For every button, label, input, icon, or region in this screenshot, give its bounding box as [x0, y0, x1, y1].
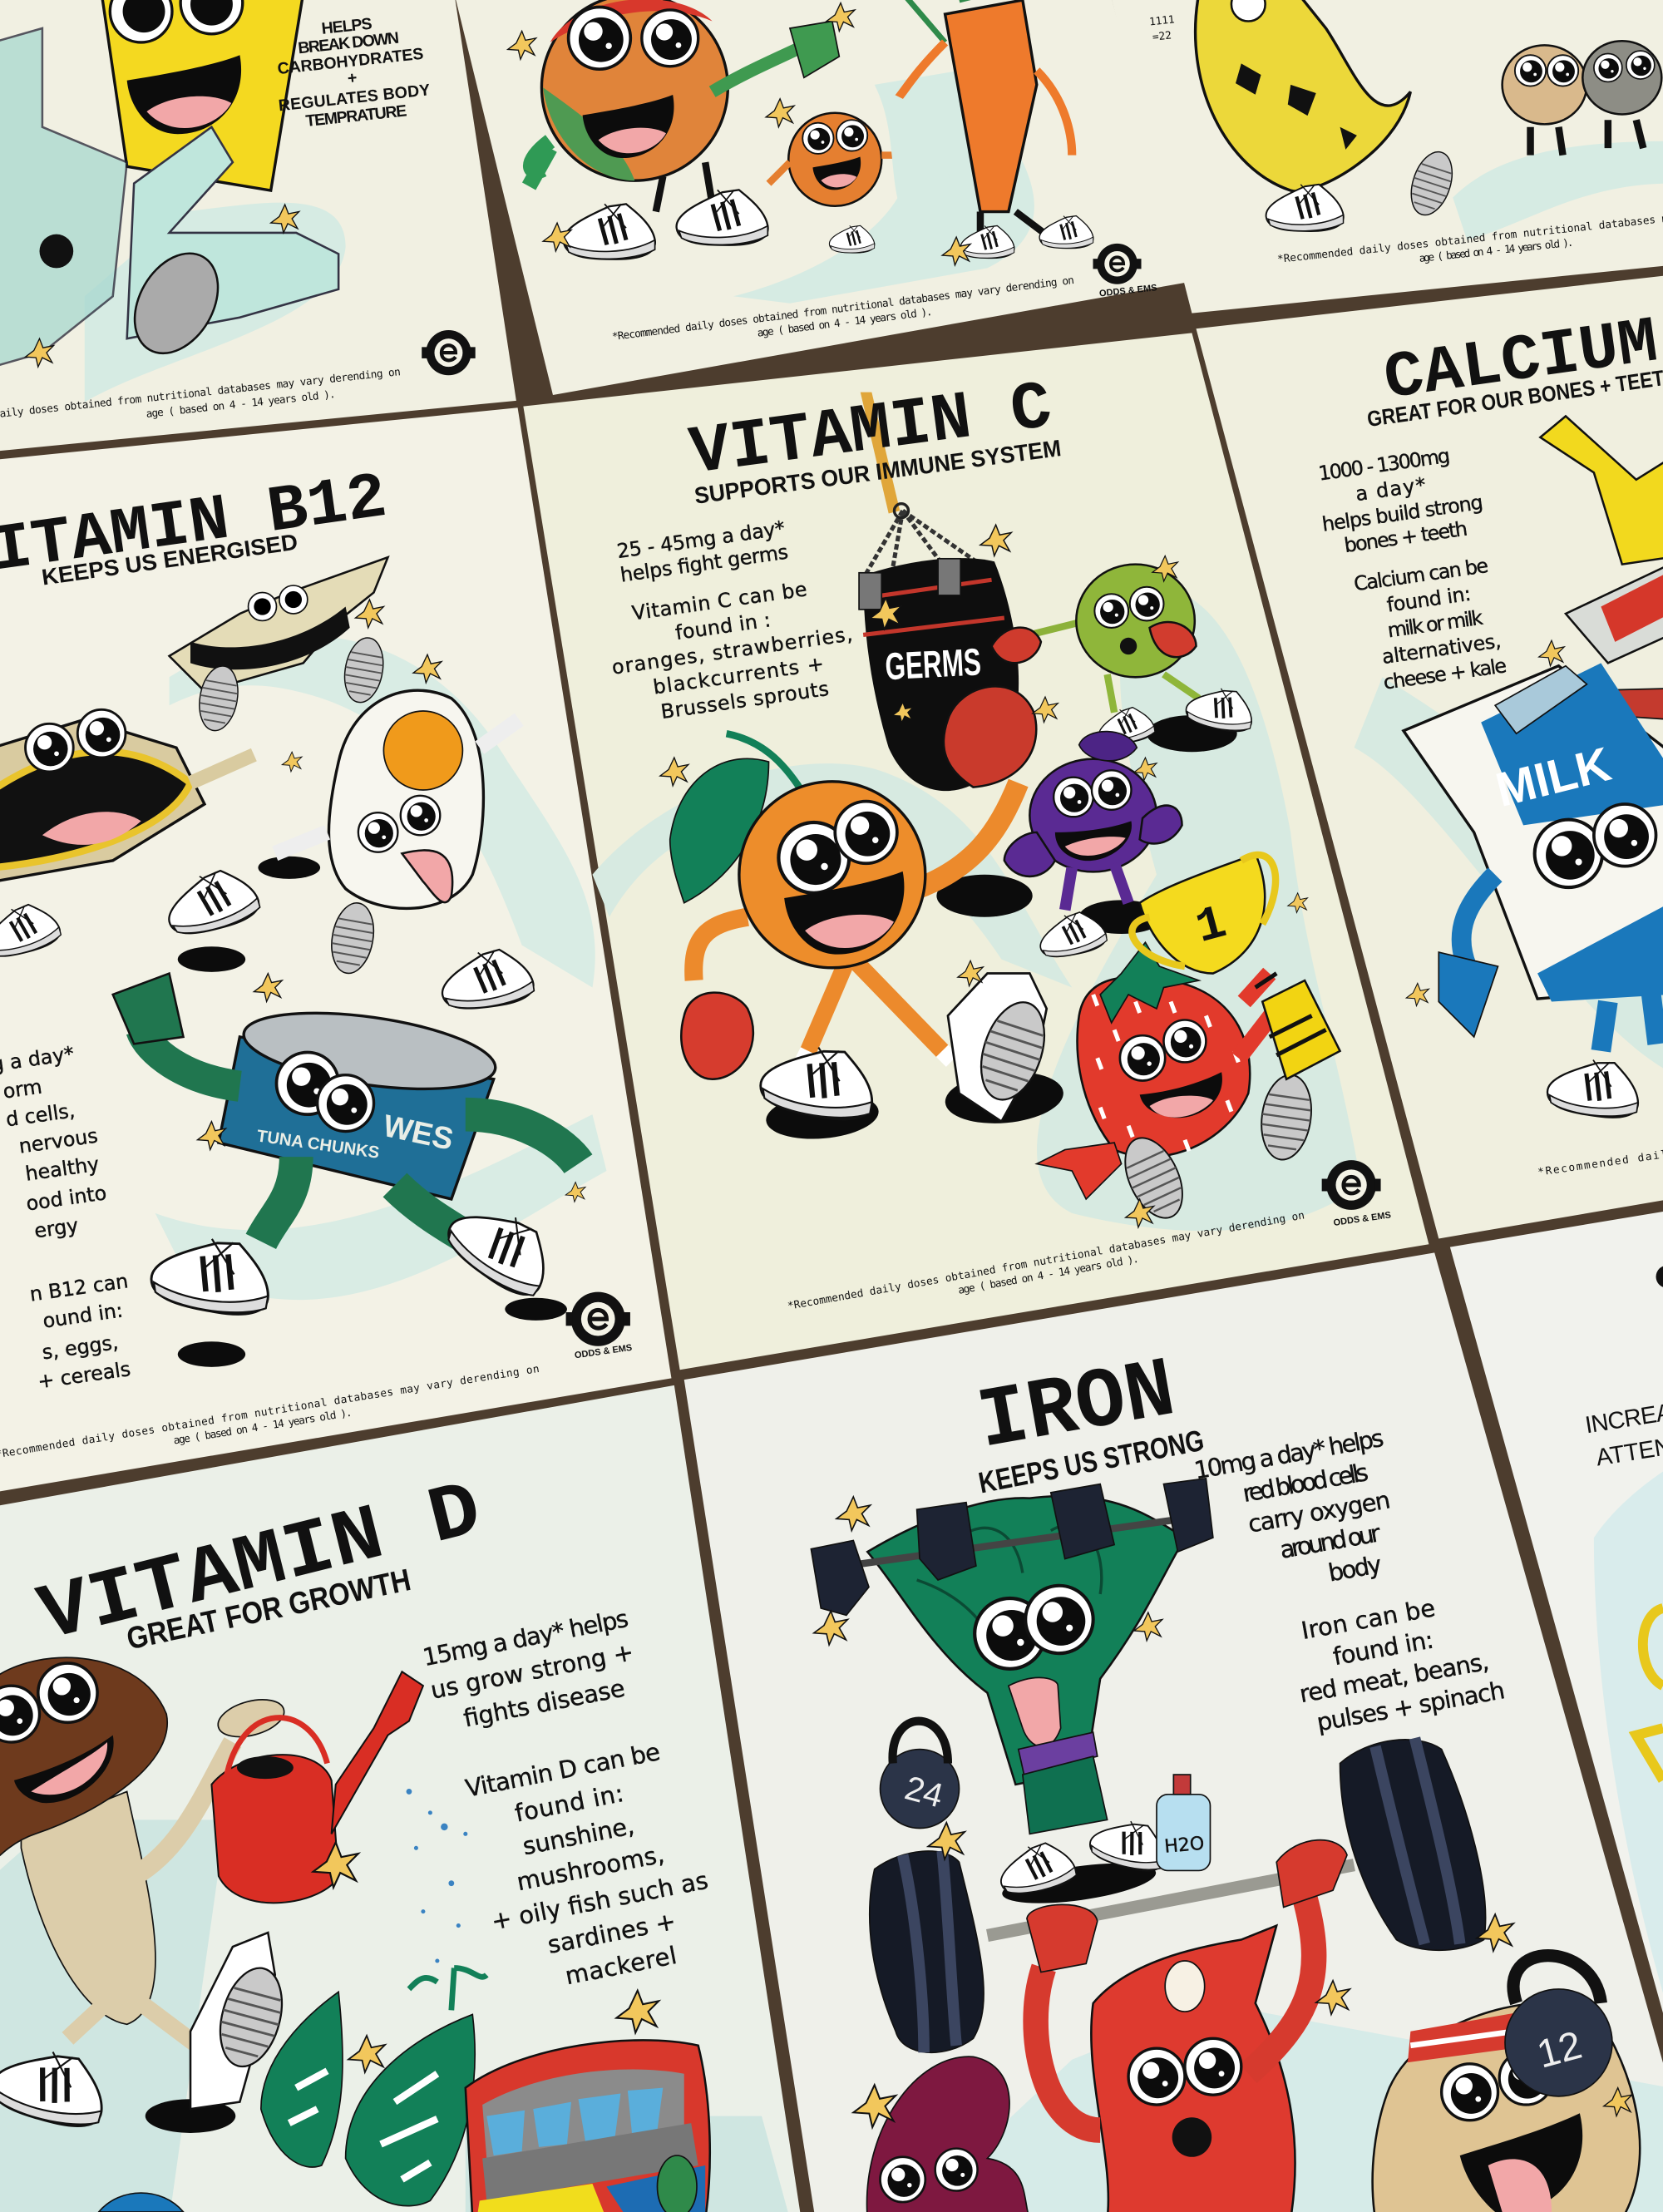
character: mango: [529, 0, 839, 259]
trophy: [1132, 853, 1340, 1079]
text: benefits: n B12 can: [28, 1269, 130, 1306]
text: benefits: [0, 1039, 142, 1394]
can sublabel: TUNA CHUNKS: [255, 1127, 381, 1163]
text: dose: [1192, 1410, 1507, 1750]
text: dose: Vitamin D can be: [463, 1737, 663, 1803]
character: top clam: [170, 557, 388, 733]
logo fragment: [1656, 1266, 1663, 1288]
label: odds and ems: ODDS & EMS: [1333, 1210, 1392, 1228]
poster: calcium (middle right): [1197, 275, 1663, 1238]
rope: [861, 393, 900, 514]
swirl background: [903, 2003, 1663, 2212]
character: water glass: [0, 28, 338, 368]
leaves: [261, 1968, 486, 2206]
character: yellow arm: [1636, 1608, 1663, 1780]
text: benefits: ood into: [25, 1181, 108, 1216]
text: dose: Brussels sprouts: [659, 677, 830, 723]
poster: water (top left): [0, 0, 516, 452]
subtitle: GREAT FOR GROWTH: [124, 1562, 413, 1656]
text: dose: 15mg a day* helps: [421, 1604, 631, 1671]
text: dose: mackerel: [563, 1941, 679, 1990]
text: dose: + oily fish such as: [489, 1866, 710, 1936]
text: benefits: BREAK DOWN: [297, 29, 400, 57]
text: dose: milk or milk: [1386, 606, 1484, 642]
character: small friends: [1503, 41, 1661, 156]
logo: [1322, 1160, 1381, 1210]
glove: right: [944, 686, 1036, 788]
sardine can: [466, 2040, 710, 2212]
text: dose: blackcurrents +: [652, 652, 826, 699]
text: dose: found in:: [512, 1779, 626, 1828]
text: dose: mushrooms,: [515, 1840, 667, 1896]
title: IRON: [971, 1342, 1182, 1472]
text: benefits: nervous: [17, 1124, 99, 1158]
barbell: [870, 1738, 1486, 2052]
text: doodle total: =22: [1152, 28, 1172, 43]
character: milk carton: [1404, 663, 1663, 1122]
label: odds and ems: ODDS & EMS: [574, 1343, 633, 1360]
poster: vitamin d (bottom left): [0, 1385, 802, 2212]
character: yellow toothbrush friend: [1540, 416, 1663, 719]
text: dose: us grow strong +: [428, 1637, 636, 1705]
logo: [422, 330, 476, 375]
text: attention: [1583, 1399, 1663, 1473]
text: dose: Vitamin C can be: [630, 577, 808, 625]
swirl background: [1594, 1467, 1663, 2017]
stars: [508, 2, 970, 265]
swirl background: [592, 588, 1361, 1231]
text: dose: red meat, beans,: [1297, 1647, 1491, 1708]
footnote: daily doses obtained from nutritional databases may vary derending on: [0, 365, 401, 420]
character: steak: [1027, 1840, 1347, 2212]
swirl background: [733, 71, 1034, 304]
character: orange: [670, 686, 1065, 1143]
text: dose: sunshine,: [521, 1811, 636, 1860]
poster: banana (top right): [1110, 0, 1663, 314]
text: dose: around our: [1278, 1518, 1383, 1564]
text: dose: pulses + spinach: [1315, 1676, 1507, 1736]
poster: vitamin c (middle centre): [523, 333, 1429, 1370]
footnote: *Recommended daily doses obtained from nutritional databases may vary derending on: [611, 274, 1075, 343]
character: strawberry: [1037, 942, 1316, 1227]
label: odds and ems: ODDS & EMS: [1098, 283, 1157, 299]
swoosh: [875, 85, 960, 239]
title: VITAMIN D: [30, 1466, 490, 1662]
glove: left: [681, 993, 753, 1079]
character: left clam: [0, 709, 263, 962]
text: benefits: +: [347, 69, 358, 88]
text: dose: alternatives,: [1380, 629, 1503, 669]
bag label: GERMS: [884, 640, 982, 688]
character: punching bag: [859, 504, 1019, 791]
carton label: MILK: [1491, 738, 1616, 817]
text: dose: [595, 509, 861, 729]
can label: WES: [380, 1108, 456, 1157]
text: dose: 10mg a day* helps: [1192, 1424, 1386, 1484]
footnote: age ( based on 4 - 14 years old ).: [957, 1252, 1140, 1296]
text: dose: cheese + kale: [1382, 654, 1508, 694]
swirl background: [0, 1819, 790, 2212]
poster: focus (bottom right): [1450, 1211, 1663, 2038]
poster: iron (bottom centre): [684, 1252, 1663, 2212]
water spray: [407, 1789, 475, 2055]
footnote: age ( based on 4 - 14 years old ).: [146, 388, 336, 420]
text: benefits: REGULATES BODY: [278, 81, 431, 115]
swirl background: [155, 636, 606, 1300]
swirl background: [85, 203, 346, 402]
text: doodle sum: 1111: [1148, 12, 1175, 27]
text: benefits: + cereals: [37, 1357, 132, 1393]
bottle label: H2O: [1163, 1834, 1205, 1858]
text: dose: Calcium can be: [1352, 554, 1490, 595]
text: benefits: HELPS: [321, 15, 373, 38]
character: carrot: [889, 0, 1093, 258]
text: benefits: ound in:: [42, 1298, 125, 1333]
text: benefits: TEMPRATURE: [305, 101, 407, 131]
text: dose: [421, 1598, 723, 2005]
text: dose: oranges, strawberries,: [610, 622, 854, 679]
swirl background: [1354, 677, 1663, 1072]
character: kidney bean: [867, 2056, 1029, 2212]
character: blackcurrant: [1004, 732, 1182, 961]
text: benefits: d cells,: [4, 1099, 76, 1131]
text: dose: body: [1326, 1550, 1384, 1587]
water bottle: [1157, 1775, 1210, 1870]
stars: [814, 1497, 1632, 2127]
kettlebell: 24: [881, 1721, 960, 1829]
text: dose: 25 - 45mg a day*: [615, 516, 787, 563]
character: potato: [1373, 1956, 1640, 2212]
swirl background: [1453, 141, 1663, 239]
stars: [313, 1842, 659, 2072]
text: dose: red blood cells: [1241, 1458, 1370, 1508]
leaf: [670, 758, 769, 903]
character: spinach: [867, 1496, 1185, 1911]
title: VITAMIN C: [685, 370, 1056, 493]
character: mushroom: [0, 1657, 292, 2134]
text: benefits: CARBOHYDRATES: [277, 45, 424, 78]
text: dose: a day*: [1354, 473, 1427, 506]
subtitle: SUPPORTS OUR IMMUNE SYSTEM: [693, 435, 1063, 509]
text: benefits: healthy: [24, 1153, 101, 1186]
kettlebell number: 12: [1532, 2023, 1587, 2077]
footnote: *Recommended daily doses obtained from nutritional databases may vary derending on: [0, 1362, 540, 1460]
stars: [660, 525, 1308, 1227]
text: benefits: ergy: [32, 1213, 80, 1242]
character: yellow cup: [101, 0, 303, 190]
footnote: age ( based on 4 - 14 years old ).: [1419, 236, 1574, 264]
character: green fruit: [992, 565, 1257, 752]
text: dose: carry oxygen: [1246, 1485, 1393, 1538]
logo: [566, 1292, 630, 1346]
title: CALCIUM: [1379, 306, 1662, 417]
watering can: [211, 1671, 423, 1903]
stars: [26, 205, 299, 367]
character: small orange: [769, 113, 931, 253]
stars: [1406, 640, 1564, 1006]
text: dose: fights disease: [461, 1674, 627, 1733]
kettlebell number: 24: [901, 1768, 947, 1815]
subtitle: KEEPS US ENERGISED: [40, 529, 299, 590]
footnote: age ( based on 4 - 14 years old ).: [757, 305, 933, 339]
subtitle: KEEPS US STRONG: [976, 1424, 1207, 1499]
text: dose: found in:: [1385, 582, 1473, 617]
character: tuna can: [113, 974, 579, 1367]
text: dose: sardines +: [545, 1907, 678, 1959]
poster: fruit + veg (top middle): [454, 0, 1187, 395]
text: benefits: [270, 9, 433, 133]
text: benefits: s, eggs,: [41, 1331, 120, 1364]
stars: [197, 600, 585, 1202]
text: dose: bones + teeth: [1343, 517, 1469, 557]
text: dose: found in:: [1331, 1625, 1436, 1671]
trophy number: 1: [1191, 896, 1232, 956]
text: dose: helps fight germs: [619, 541, 790, 587]
text: dose: 1000 - 1300mg: [1317, 444, 1452, 486]
character: banana: [1196, 0, 1459, 231]
logo: [1093, 244, 1142, 284]
text: dose: found in :: [674, 608, 772, 644]
text: dose: [1314, 440, 1508, 699]
text: dose: Iron can be: [1299, 1593, 1438, 1645]
footnote: age ( based on 4 - 14 years old ).: [172, 1406, 353, 1447]
text: dose: helps build strong: [1320, 491, 1484, 536]
text: benefits: orm: [2, 1074, 43, 1104]
footnote: *Recommended daily doses obtained from nutritional databases may vary derending on: [787, 1208, 1305, 1312]
dumbbell: spinach weights: [811, 1479, 1213, 1615]
hat: [99, 2193, 184, 2212]
poster: vitamin b12 (middle left): [0, 407, 671, 1493]
character: egg: [178, 690, 535, 1013]
